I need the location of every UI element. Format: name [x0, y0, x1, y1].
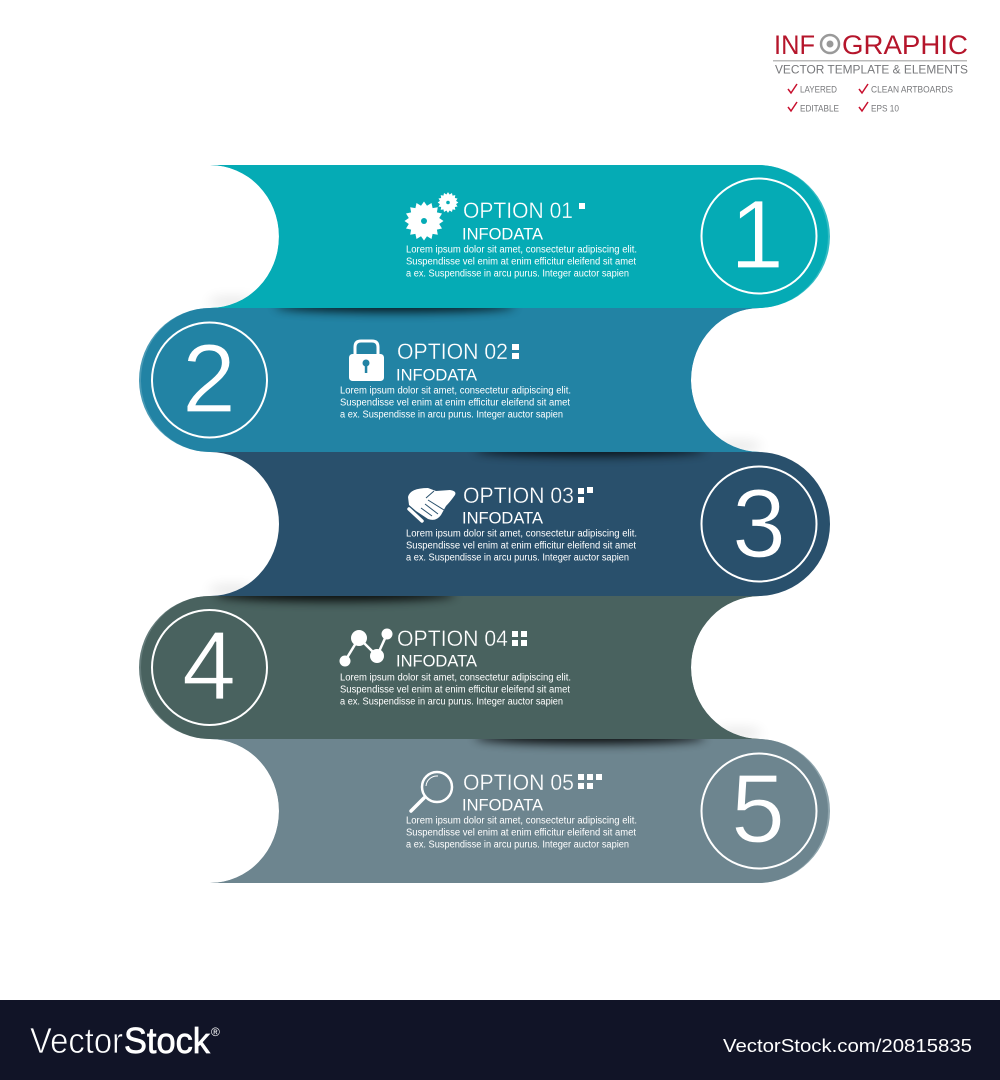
number circle 4: [152, 610, 267, 725]
icon: handshake: [408, 488, 455, 521]
body text: Suspendisse vel enim at enim efficitur eleifend sit amet: [406, 540, 636, 552]
footer bar: [0, 1000, 1000, 1080]
band 4 rim: [139, 596, 760, 739]
body text: a ex. Suspendisse in arcu purus. Integer auctor sapien: [406, 268, 629, 280]
subheading infodata: INFODATA: [462, 224, 544, 244]
number circle 5: [702, 754, 816, 868]
band 5 shape: [210, 739, 828, 883]
number circle 3: [702, 466, 816, 582]
icon: magnifier: [411, 772, 452, 811]
number 5: 5: [731, 754, 785, 863]
number 1: 1: [730, 180, 784, 289]
subheading infodata: INFODATA: [396, 366, 478, 384]
band 2 rim: [139, 308, 760, 452]
logo subtitle: VECTOR TEMPLATE & ELEMENTS: [775, 62, 968, 76]
panel: option 2: [139, 300, 760, 452]
subheading infodata: INFODATA: [462, 508, 544, 528]
body text: Suspendisse vel enim at enim efficitur eleifend sit amet: [406, 256, 636, 268]
band 4 shape: [141, 596, 760, 739]
logo target icon: [821, 35, 839, 53]
band 5 shadow: [475, 730, 705, 744]
body text: Lorem ipsum dolor sit amet, consectetur adipiscing elit.: [340, 386, 571, 396]
body text: Lorem ipsum dolor sit amet, consectetur adipiscing elit.: [340, 672, 571, 684]
body text: [340, 672, 571, 708]
band 5 rim: [210, 739, 830, 883]
band 2 shape: [141, 308, 760, 452]
body text: a ex. Suspendisse in arcu purus. Integer auctor sapien: [406, 552, 629, 564]
number 2: 2: [182, 324, 236, 433]
soft corner shadows: [208, 297, 762, 738]
heading option 02: OPTION 02: [397, 339, 508, 364]
body text: a ex. Suspendisse in arcu purus. Integer auctor sapien: [340, 696, 563, 708]
band 3 shadow: [474, 452, 706, 462]
body text: a ex. Suspendisse in arcu purus. Integer auctor sapien: [340, 410, 563, 420]
number 3: 3: [732, 469, 786, 578]
icon: network nodes: [340, 628, 392, 666]
number circle 2: [152, 322, 267, 438]
number 4: 4: [182, 611, 236, 720]
heading option 03: OPTION 03: [463, 483, 574, 508]
squares: [578, 774, 602, 789]
body text: a ex. Suspendisse in arcu purus. Integer auctor sapien: [406, 840, 629, 850]
check list: [788, 84, 953, 114]
body text: Lorem ipsum dolor sit amet, consectetur adipiscing elit.: [406, 816, 637, 826]
logo word INF: INF: [774, 30, 815, 60]
footer logo: Stock: [124, 1020, 211, 1061]
band 4 shadow: [214, 596, 456, 608]
band 2 shadow: [275, 300, 515, 312]
footer logo: Vector: [30, 1020, 123, 1061]
squares: [512, 344, 519, 359]
band 1 shape: [210, 165, 828, 308]
footer url: VectorStock.com/20815835: [723, 1035, 972, 1056]
square: [579, 203, 585, 209]
panel: option 4: [139, 587, 760, 739]
body text: Suspendisse vel enim at enim efficitur eleifend sit amet: [406, 828, 636, 838]
footer logo: [30, 1020, 211, 1061]
body text: Suspendisse vel enim at enim efficitur eleifend sit amet: [340, 398, 570, 408]
icon: padlock: [349, 341, 384, 381]
number circle 1: [702, 178, 816, 294]
squares: [512, 631, 527, 646]
registered mark: ®: [211, 1025, 220, 1039]
body text: Lorem ipsum dolor sit amet, consectetur adipiscing elit.: [406, 244, 637, 256]
heading option 05: OPTION 05: [463, 770, 574, 795]
band 3 shape: [210, 452, 830, 596]
body text: [340, 386, 571, 420]
check list: CLEAN ARTBOARDS: [871, 84, 953, 94]
panel: option 5: [210, 730, 830, 883]
band 1 rim: [210, 165, 830, 308]
logo word GRAPHIC: GRAPHIC: [842, 30, 968, 60]
logo block: infographic: [773, 30, 968, 114]
body text: [406, 528, 637, 564]
body text: [406, 816, 637, 850]
heading option 01: OPTION 01: [463, 198, 573, 223]
check list: EPS 10: [871, 104, 899, 114]
icon: gears: [404, 192, 458, 240]
panel: option 3: [210, 444, 830, 596]
panel: option 1: [210, 165, 830, 308]
body text: Lorem ipsum dolor sit amet, consectetur adipiscing elit.: [406, 528, 637, 540]
subheading infodata: INFODATA: [462, 796, 544, 814]
check list: LAYERED: [800, 84, 837, 94]
squares: [578, 487, 593, 503]
check list: EDITABLE: [800, 104, 839, 114]
subheading infodata: INFODATA: [396, 652, 478, 670]
body text: [406, 244, 637, 280]
heading option 04: OPTION 04: [397, 626, 508, 651]
body text: Suspendisse vel enim at enim efficitur eleifend sit amet: [340, 684, 570, 696]
